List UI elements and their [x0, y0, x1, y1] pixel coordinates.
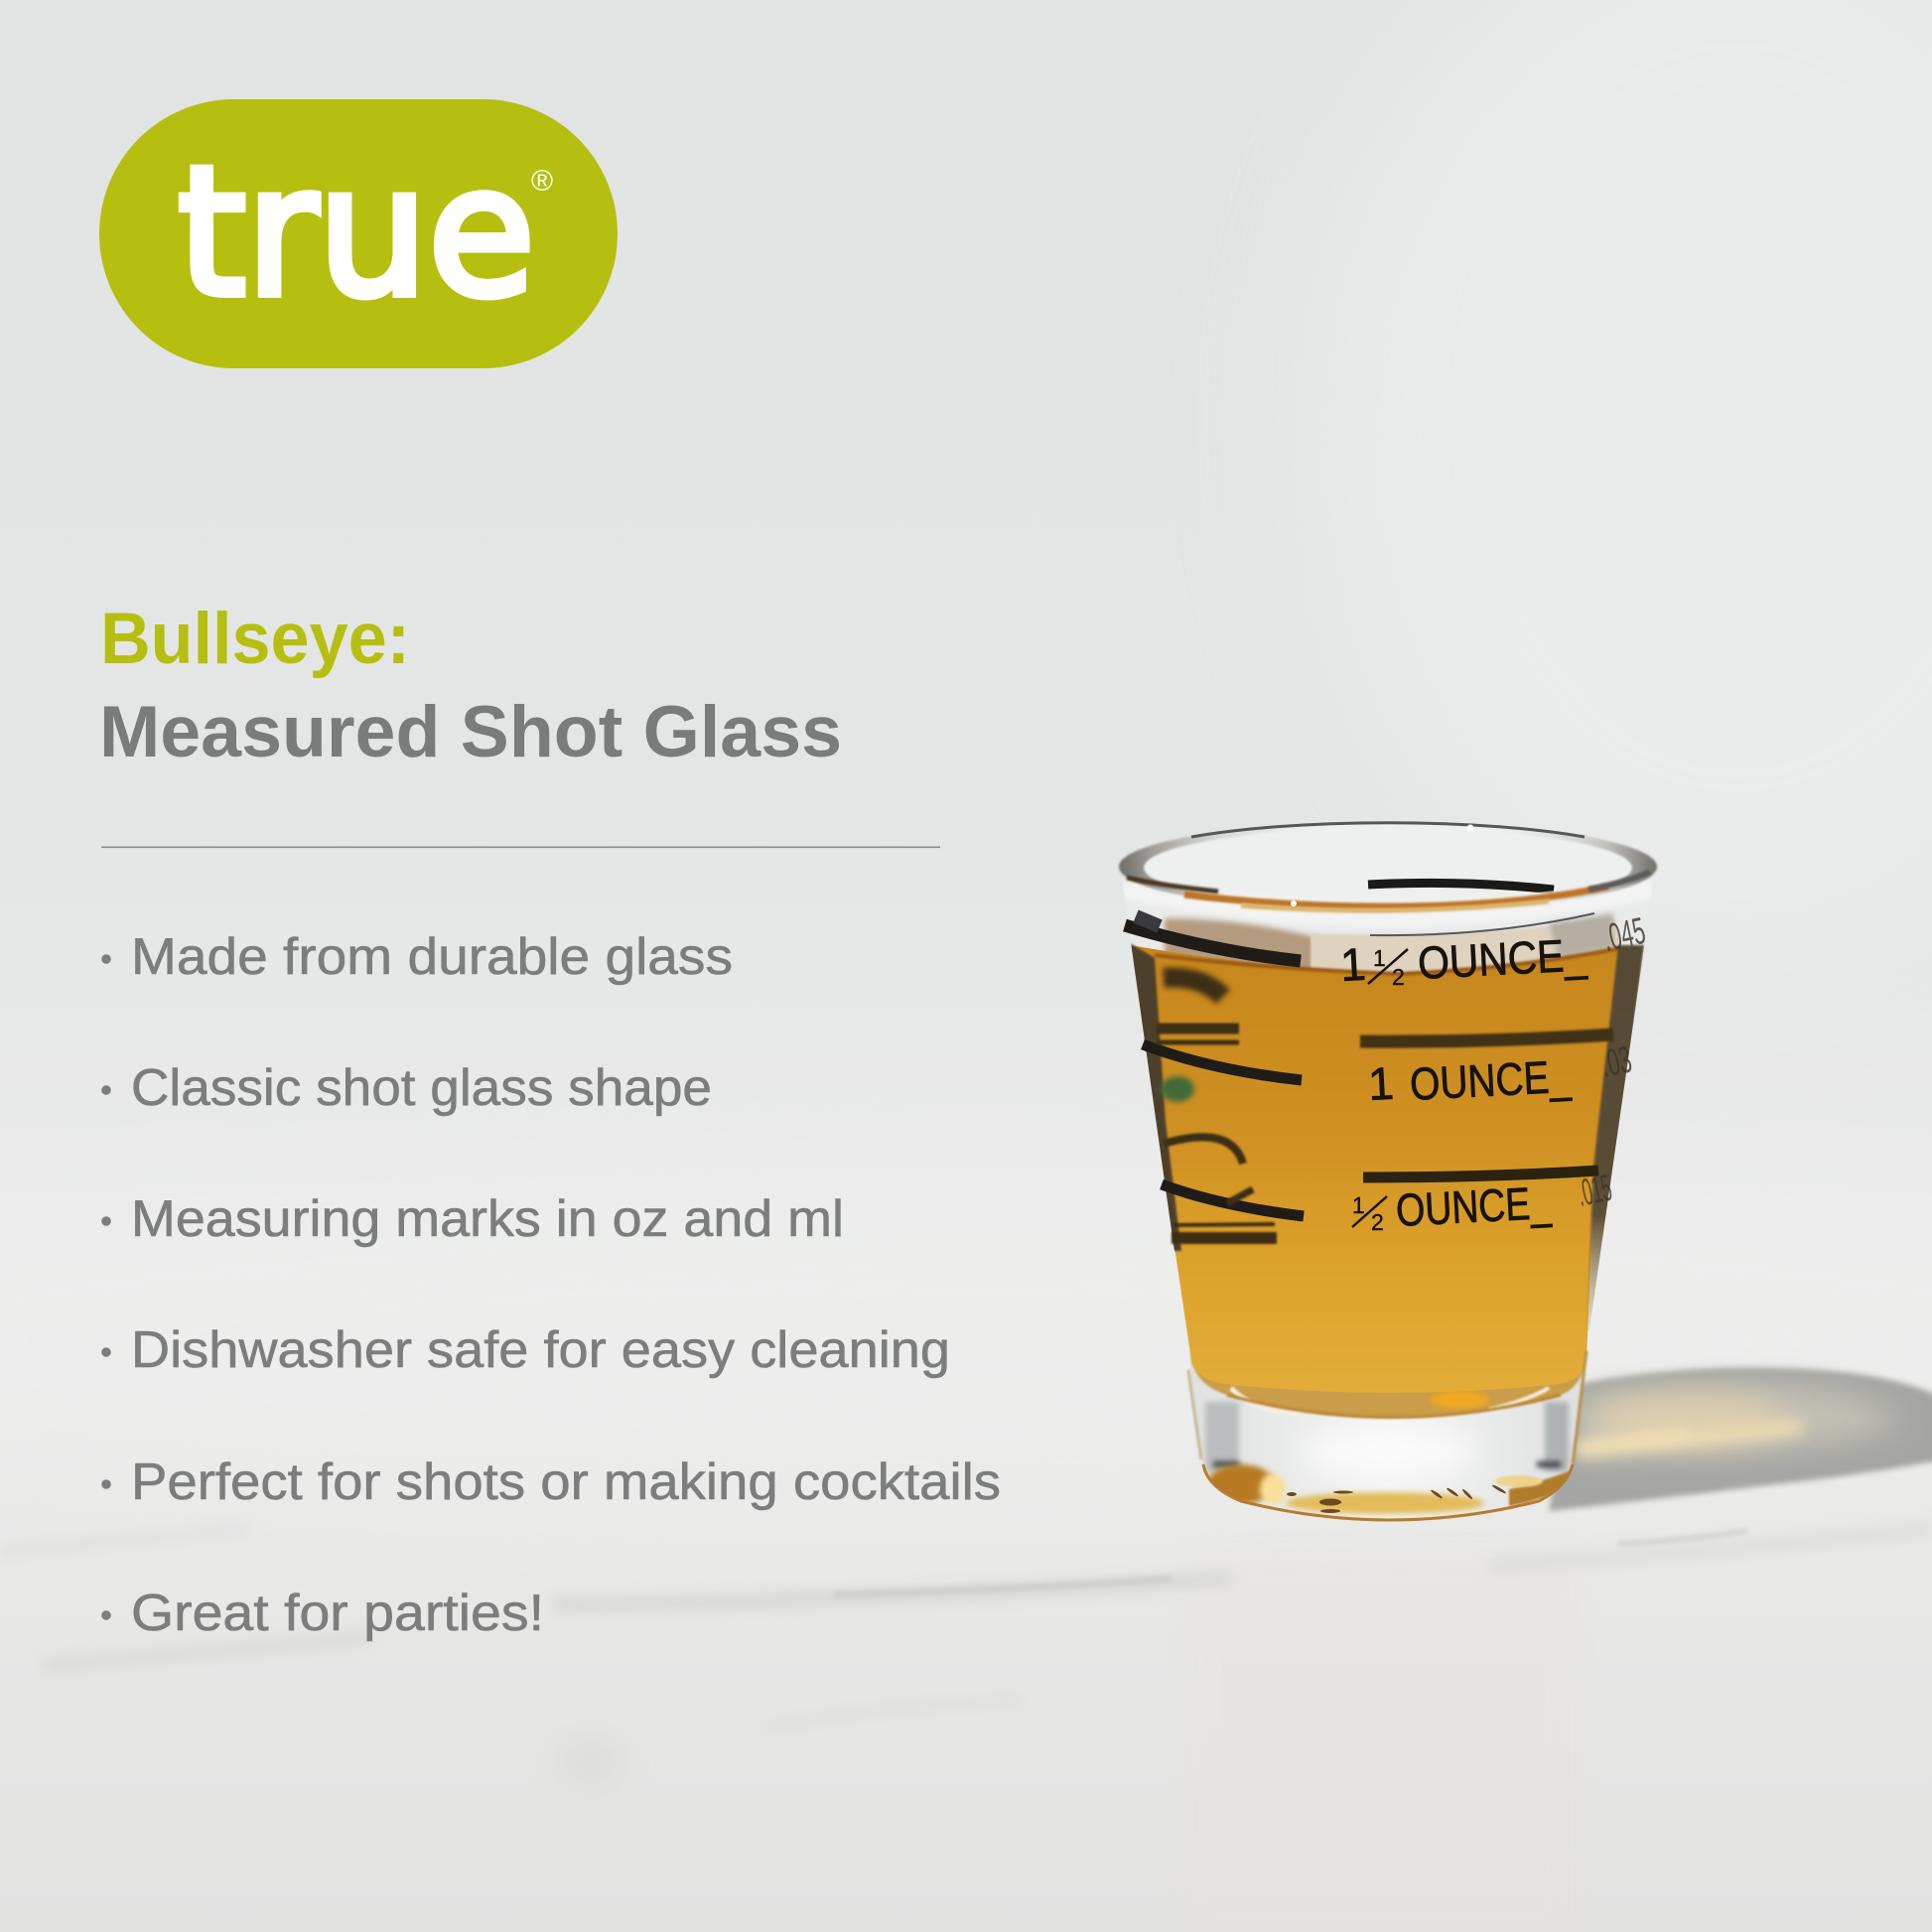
1 ounce label: OUNCE_	[1409, 1050, 1573, 1110]
1 ounce label: 1	[1367, 1057, 1395, 1110]
logo: true pill	[99, 99, 618, 368]
liquid surface line	[1155, 948, 1620, 974]
base amber left blob	[1207, 1464, 1275, 1504]
glass contents	[1124, 886, 1652, 1520]
glass opening	[1122, 823, 1654, 910]
heading	[99, 599, 842, 772]
base specks	[1287, 1484, 1507, 1513]
base outer amber rim	[1203, 1464, 1573, 1520]
rim	[1119, 822, 1657, 935]
bullet 4: Dishwasher safe for easy cleaning	[131, 1321, 950, 1379]
clear band below rim	[1124, 886, 1652, 914]
1 1/2 ounce label: 1	[1373, 945, 1386, 971]
bullet 2: Classic shot glass shape	[131, 1059, 712, 1117]
base center glow	[1318, 1438, 1463, 1465]
1 1/2 ounce label	[1339, 928, 1589, 991]
blurred refracted marks	[1157, 978, 1277, 1238]
ounce labels	[1339, 928, 1589, 1236]
amber meniscus band	[1191, 1360, 1587, 1418]
bullet 6: Great for parties!	[131, 1585, 544, 1642]
1/2 ounce label: 1	[1352, 1192, 1365, 1218]
side decimal labels: .045	[1599, 910, 1649, 960]
meniscus reflections	[1231, 1388, 1301, 1414]
heading: Measured Shot Glass	[99, 692, 842, 772]
right refraction band	[1587, 945, 1644, 1330]
1/2 ounce label: OUNCE_	[1395, 1176, 1553, 1236]
base right amber	[1509, 1469, 1574, 1506]
bullet 3: Measuring marks in oz and ml	[131, 1190, 844, 1248]
green refraction blob	[1161, 1076, 1194, 1102]
left measure lines	[1125, 916, 1304, 1216]
glass base	[1188, 1350, 1587, 1520]
left refraction band	[1130, 943, 1181, 1251]
glass shadow	[1549, 1367, 1932, 1511]
residue above liquid	[1161, 914, 1312, 968]
base side panels	[1205, 1402, 1239, 1471]
back measure line	[1368, 883, 1554, 890]
bullet 5: Perfect for shots or making cocktails	[131, 1453, 1001, 1511]
side decimal labels	[1574, 910, 1649, 1215]
feature list	[101, 928, 1001, 1642]
logo: true pill: ®	[531, 165, 553, 198]
glass body	[1122, 879, 1654, 1520]
1 1/2 ounce label: OUNCE_	[1417, 928, 1589, 989]
shot glass	[1119, 822, 1657, 1520]
1 1/2 ounce label: 1	[1339, 938, 1367, 991]
1 ounce label	[1367, 1050, 1573, 1110]
side decimal labels: .015	[1574, 1168, 1615, 1215]
heading: Bullseye:	[100, 599, 410, 679]
liquid	[1130, 945, 1622, 1393]
right measure lines	[1360, 1035, 1613, 1177]
base amber center pool	[1286, 1492, 1484, 1514]
glass side highlights	[1188, 1370, 1201, 1459]
1/2 ounce label: 2	[1371, 1209, 1384, 1235]
logo: true pill: true	[178, 129, 535, 337]
side decimal labels: .03	[1597, 1038, 1635, 1086]
bullet 1: Made from durable glass	[131, 928, 733, 986]
1 1/2 ounce label: 2	[1392, 964, 1405, 990]
1/2 ounce label	[1352, 1176, 1553, 1236]
